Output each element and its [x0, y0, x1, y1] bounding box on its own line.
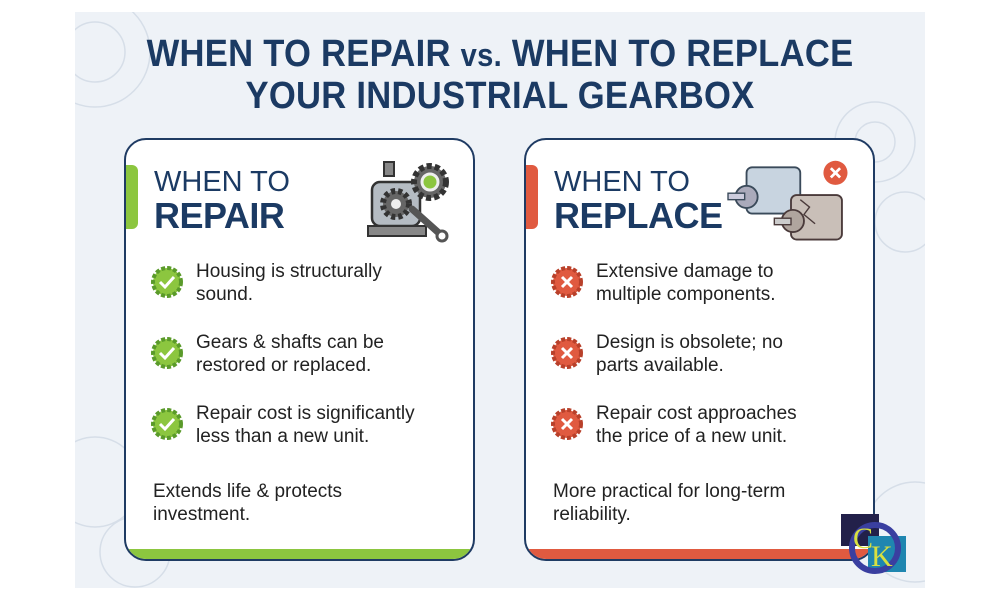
item: cost: the price of a new unit. — [596, 426, 787, 447]
panel: replace — [524, 138, 875, 561]
logo: CK — [841, 514, 906, 574]
panel: repair: REPAIR — [154, 195, 284, 236]
item: obsolete: parts available. — [596, 355, 724, 376]
title — [146, 33, 853, 117]
item: damage: Extensive damage to — [596, 261, 773, 282]
heading: when to replace: WHEN TO — [554, 166, 690, 198]
item: obsolete — [551, 332, 783, 376]
item: housing: sound. — [196, 284, 253, 305]
footer text — [553, 481, 785, 525]
item: gears — [151, 332, 384, 376]
footer text — [153, 481, 342, 525]
title: YOUR INDUSTRIAL GEARBOX — [245, 75, 755, 117]
footer text: reliability. — [553, 504, 631, 525]
icon: gearbox with gears and wrench — [367, 161, 449, 242]
item: damage: multiple components. — [596, 284, 776, 305]
item: gears: Gears & shafts can be — [196, 332, 384, 353]
panel: repair — [124, 138, 475, 561]
item: obsolete: Design is obsolete; no — [596, 332, 783, 353]
title: WHEN TO REPAIR vs. WHEN TO REPLACE — [147, 33, 853, 75]
heading: when to repair: WHEN TO — [154, 166, 290, 198]
item: housing: Housing is structurally — [196, 261, 382, 282]
item: gears: restored or replaced. — [196, 355, 371, 376]
icon: new and broken gearbox — [727, 160, 848, 240]
item: cost: Repair cost is significantly — [196, 403, 415, 424]
footer text: Extends life & protects — [153, 481, 342, 502]
logo: CK: K — [871, 540, 893, 573]
footer text: investment. — [153, 504, 250, 525]
footer text: More practical for long-term — [553, 481, 785, 502]
panel: replace: REPLACE — [554, 195, 723, 236]
item: cost: less than a new unit. — [196, 426, 369, 447]
item: cost — [151, 403, 415, 447]
item: cost — [551, 403, 797, 447]
logo: CK: C — [853, 522, 873, 555]
item: damage — [551, 261, 776, 305]
item: cost: Repair cost approaches — [596, 403, 797, 424]
item: housing — [151, 261, 382, 305]
